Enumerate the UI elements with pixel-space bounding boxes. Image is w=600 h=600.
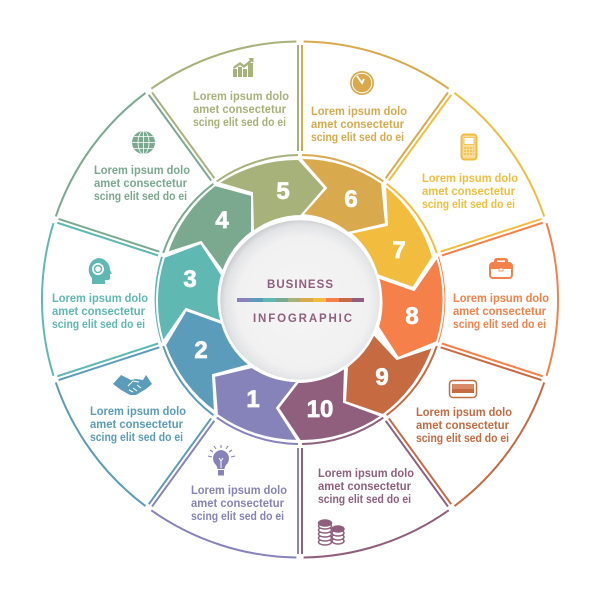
inner ring: coloured arcs	[156, 155, 444, 444]
number 3: 3	[183, 266, 197, 293]
segment 10	[278, 367, 382, 441]
panel: sector 10 outline and text	[302, 421, 449, 558]
icon: handshake	[113, 375, 152, 395]
number 2: 2	[194, 337, 208, 364]
text: sector 8: Lorem ipsum dolo	[453, 291, 549, 305]
text: sector 1: amet consectetur	[191, 496, 284, 510]
segment 2	[165, 310, 250, 412]
panel: sector 2 outline and text	[56, 347, 211, 506]
text: sector 1	[191, 483, 287, 523]
segment 9	[345, 328, 433, 415]
text: sector 4: scing elit sed do ei	[94, 189, 187, 203]
number 6: 6	[344, 186, 358, 213]
text: sector 5: scing elit sed do ei	[193, 115, 286, 129]
icon: head with gears	[89, 258, 112, 284]
text: sector 7: amet consectetur	[422, 184, 515, 198]
segment 7	[350, 185, 433, 288]
text: sector 3: scing elit sed do ei	[52, 317, 145, 331]
text: sector 1: Lorem ipsum dolo	[191, 483, 287, 497]
panel: sector 4 outline and text	[56, 93, 211, 252]
number 9: 9	[375, 364, 389, 391]
text: sector 2	[90, 404, 186, 444]
number 5: 5	[276, 178, 290, 205]
text: sector 1: scing elit sed do ei	[191, 509, 284, 523]
text: sector 10	[318, 466, 414, 506]
segment 5	[218, 159, 325, 232]
text: sector 8: scing elit sed do ei	[453, 317, 546, 331]
panel: sector 7 outline and text	[389, 93, 544, 252]
number 8: 8	[405, 303, 419, 330]
number 10: 10	[307, 396, 333, 423]
number 7: 7	[392, 237, 406, 264]
text: sector 2: scing elit sed do ei	[90, 430, 183, 444]
text: sector 2: amet consectetur	[90, 417, 183, 431]
segment 8	[377, 257, 444, 358]
text: sector 4	[94, 163, 190, 203]
panel: sector 3 outline and text	[42, 223, 158, 376]
icon: globe	[132, 131, 155, 154]
segment 6	[300, 158, 386, 233]
icon: clock	[350, 71, 374, 95]
text: sector 10: amet consectetur	[318, 479, 411, 493]
text: sector 10: scing elit sed do ei	[318, 492, 411, 506]
text: sector 3: Lorem ipsum dolo	[52, 291, 148, 305]
icon: mobile phone	[462, 134, 476, 160]
heading: business: BUSINESS	[267, 279, 333, 291]
panel: sector 9 outline and text	[389, 347, 544, 506]
segment 4	[167, 185, 252, 272]
text: sector 3	[52, 291, 148, 331]
text: sector 5: Lorem ipsum dolo	[193, 89, 289, 103]
text: sector 4: Lorem ipsum dolo	[94, 163, 190, 177]
text: sector 9: amet consectetur	[416, 418, 509, 432]
text: sector 6	[311, 104, 407, 144]
text: sector 10: Lorem ipsum dolo	[318, 466, 414, 480]
text: sector 5: amet consectetur	[193, 102, 286, 116]
text: sector 8: amet consectetur	[453, 304, 546, 318]
text: sector 3: amet consectetur	[52, 304, 145, 318]
text: sector 4: amet consectetur	[94, 176, 187, 190]
icon: coin stacks	[318, 520, 344, 545]
number 4: 4	[215, 207, 229, 234]
text: sector 9	[416, 405, 512, 445]
icon: credit card	[450, 380, 476, 398]
text: sector 9: scing elit sed do ei	[416, 431, 509, 445]
text: sector 7	[422, 171, 518, 211]
segment wheel	[157, 158, 444, 441]
text: sector 9: Lorem ipsum dolo	[416, 405, 512, 419]
panel: sector 1 outline and text	[151, 421, 298, 558]
panel: sector 6 outline and text	[302, 42, 449, 178]
text: sector 2: Lorem ipsum dolo	[90, 404, 186, 418]
text: sector 6: Lorem ipsum dolo	[311, 104, 407, 118]
segment numbers	[183, 178, 419, 423]
rainbow divider bar	[237, 298, 364, 302]
panel: sector 8 outline and text	[442, 223, 558, 376]
text: sector 7: Lorem ipsum dolo	[422, 171, 518, 185]
text: sector 6: amet consectetur	[311, 117, 404, 131]
icon: light bulb	[208, 445, 235, 476]
segment 3	[157, 243, 222, 342]
icon: bar chart with arrow	[233, 58, 254, 77]
text: sector 6: scing elit sed do ei	[311, 130, 404, 144]
number 1: 1	[246, 386, 260, 413]
segment 1	[214, 367, 298, 441]
text: sector 8	[453, 291, 549, 331]
centre disc	[219, 219, 381, 381]
text: sector 7: scing elit sed do ei	[422, 197, 515, 211]
panel: sector 5 outline and text	[151, 42, 298, 178]
icon: briefcase	[490, 258, 512, 278]
heading: infographic: INFOGRAPHIC	[253, 313, 352, 325]
text: sector 5	[193, 89, 289, 129]
